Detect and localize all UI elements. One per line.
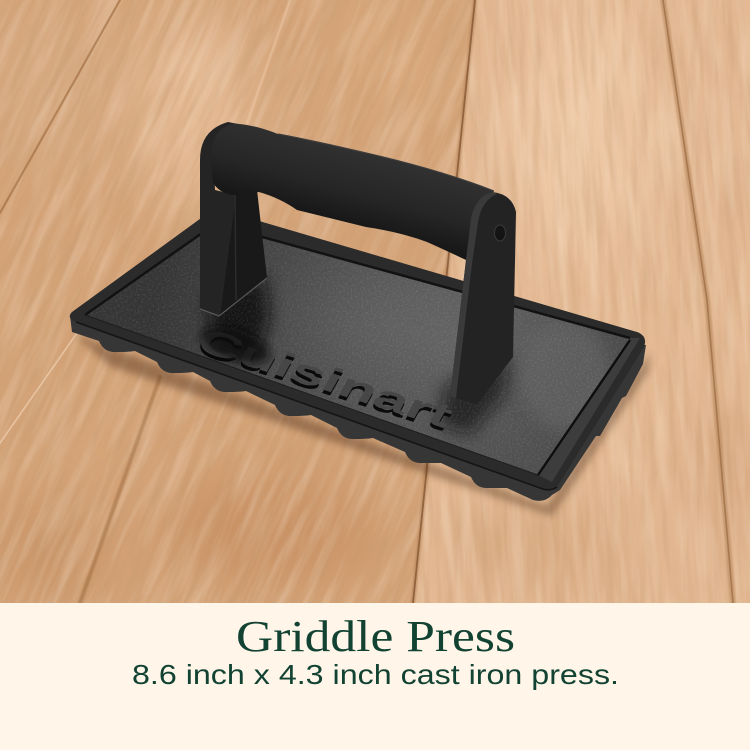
right handle post [450,192,516,404]
caption band [0,603,750,750]
plank seams [0,0,733,603]
post base lip [200,278,267,316]
wood grain: left planks [0,0,472,603]
embossed logo: Cuisinart [189,325,459,438]
recessed cooking surface [85,224,630,475]
post side face [220,190,267,314]
embossed logo [188,322,461,438]
rim front edge [76,322,557,490]
plank: right of centre [413,0,750,603]
logo dark reflection [196,319,274,371]
toothed underside [70,316,646,501]
post highlight [450,192,497,398]
post hole [494,225,506,241]
plank: left of centre [0,0,475,603]
subtitle: 8.6 inch x 4.3 inch cast iron press. [132,659,619,690]
press shadow on wood [74,334,650,516]
left handle post [200,122,267,317]
post front face [200,122,238,317]
soft plank shading [0,0,750,595]
press base plate [70,208,646,501]
recess front groove [85,315,538,475]
title: Griddle Press [236,612,515,661]
rim right band [538,338,640,482]
rim outline [70,208,645,490]
wood grain: right planks [422,0,750,603]
recess back edge [85,224,630,338]
surface sheen and reflections [90,238,628,473]
recess right groove [538,340,630,475]
griddle press [70,122,646,501]
grip handle [211,124,494,260]
embossed logo: Cuisinart [190,322,460,435]
